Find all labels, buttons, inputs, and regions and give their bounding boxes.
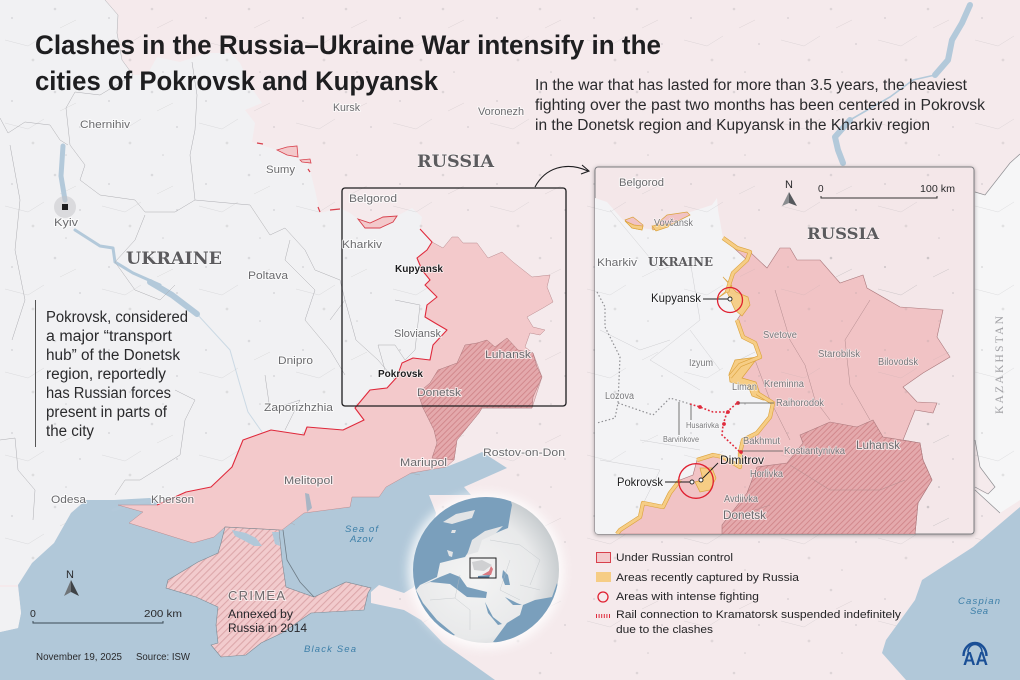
intro text: In the war that has lasted for more than 3.5 years, the heaviest xyxy=(535,77,968,94)
suspended grey rail xyxy=(597,292,690,423)
main map labels: Kupyansk xyxy=(395,263,443,275)
inset labels: Izyum xyxy=(689,358,713,369)
intro text: fighting over the past two months has been centered in Pokrovsk xyxy=(535,97,985,114)
inset oblast lines xyxy=(740,290,905,515)
Kazakhstan territory xyxy=(975,154,1020,513)
inset labels: Luhansk xyxy=(856,438,901,452)
inset labels: Lozova xyxy=(605,391,634,402)
side note: the city xyxy=(46,423,94,440)
sea labels: Azov xyxy=(349,534,374,545)
legend: recently captured: Areas recently captured by Russia xyxy=(616,572,800,584)
main map labels: Sloviansk xyxy=(394,328,441,340)
Black Sea xyxy=(478,575,490,578)
main map labels: Voronezh xyxy=(478,106,524,118)
inset labels: RUSSIA xyxy=(807,224,880,243)
sea labels: Sea xyxy=(970,606,988,617)
north arrow main xyxy=(64,569,79,596)
locator box xyxy=(342,188,566,406)
Kakhovka reservoir xyxy=(305,493,312,512)
main map labels: Luhansk xyxy=(485,349,532,361)
Crimea annotation: Russia in 2014 xyxy=(228,623,308,635)
Red Sea xyxy=(485,602,502,625)
main map labels: Odesa xyxy=(51,494,87,506)
Kyiv marker xyxy=(54,196,76,218)
yellow front line xyxy=(617,238,773,534)
rivers xyxy=(61,5,970,510)
main map labels: Dnipro xyxy=(278,355,313,367)
inset scale bar xyxy=(818,184,955,198)
side note xyxy=(35,300,188,447)
legend: under Russian control: Under Russian control xyxy=(616,552,733,564)
inset labels: Belgorod xyxy=(619,177,664,189)
Kharkiv border patch xyxy=(358,216,397,228)
main map labels: Kharkiv xyxy=(342,239,383,251)
inset labels: Kreminna xyxy=(764,379,804,390)
main map labels: UKRAINE xyxy=(126,249,222,269)
inset scale bar: 100 km xyxy=(920,184,955,195)
inset labels: Avdiivka xyxy=(724,494,758,505)
scale bar main: 0 xyxy=(30,608,36,620)
Crimea annotation: CRIMEA xyxy=(228,588,285,603)
inset labels: Kharkiv xyxy=(597,257,638,269)
Crimea xyxy=(166,527,371,657)
Caspian Sea xyxy=(882,507,1020,680)
inset labels: Svetove xyxy=(763,330,797,341)
side note: a major “transport xyxy=(46,328,173,345)
inset labels: Dimitrov xyxy=(720,453,764,467)
inset labels: UKRAINE xyxy=(648,255,713,269)
inset occupied area xyxy=(617,238,950,534)
Greenland and Iceland xyxy=(443,510,475,557)
front line main xyxy=(157,229,447,505)
main map labels: Poltava xyxy=(248,270,289,282)
inset north arrow xyxy=(782,179,797,206)
Danube delta land xyxy=(0,587,21,632)
legend: intense fighting: Areas with intense fighting xyxy=(616,591,759,603)
legend xyxy=(596,552,902,636)
Ukraine territory xyxy=(0,0,447,585)
side note: Pokrovsk, considered xyxy=(46,309,188,326)
main map labels xyxy=(51,102,565,506)
sea labels xyxy=(304,524,1000,655)
Sumy border patch xyxy=(277,146,311,163)
inset labels: Bakhmut xyxy=(743,436,780,447)
main map labels: Kursk xyxy=(333,102,360,114)
Black Sea and Sea of Azov xyxy=(0,452,507,680)
date and source: Source: ISW xyxy=(136,652,191,663)
main map labels: Rostov-on-Don xyxy=(483,447,565,459)
title xyxy=(35,30,661,96)
scale bar main xyxy=(30,608,182,623)
inset labels: Liman xyxy=(732,382,757,393)
globe locator box xyxy=(470,558,496,578)
side note: has Russian forces xyxy=(46,385,171,402)
scale bar main: 200 km xyxy=(144,608,182,620)
main map labels: Kherson xyxy=(151,494,194,506)
inset labels: Bilovodsk xyxy=(878,357,919,368)
date and source: November 19, 2025 xyxy=(36,652,122,663)
fighting circles xyxy=(665,288,742,498)
main map labels: Kyiv xyxy=(54,217,79,229)
recently captured zones xyxy=(625,212,770,492)
intro text xyxy=(535,77,985,134)
main map labels: Zaporizhzhia xyxy=(264,402,334,414)
Kazakhstan label: KAZAKHSTAN xyxy=(994,315,1006,414)
legend: rail connection: due to the clashes xyxy=(616,624,714,636)
inset map xyxy=(595,167,974,534)
inset Donbas hatched area xyxy=(722,420,932,534)
inset labels: Barvinkove xyxy=(663,435,699,444)
Caspian xyxy=(502,570,510,585)
sea labels: Caspian xyxy=(958,596,1000,607)
main map labels: RUSSIA xyxy=(417,152,495,172)
leader lines xyxy=(679,402,783,451)
north arrow main: N xyxy=(66,569,74,581)
main map labels: Belgorod xyxy=(349,193,397,205)
inset labels: Kostiantynivka xyxy=(784,446,845,457)
occupied territory main map xyxy=(118,143,553,657)
Crimea annotation: Annexed by xyxy=(228,609,293,621)
Sivash lagoons xyxy=(232,530,280,546)
legend: rail connection: Rail connection to Kramatorsk suspended indefinitely xyxy=(616,609,902,621)
main map labels: Melitopol xyxy=(284,475,333,487)
inset labels: Kupyansk xyxy=(651,291,702,305)
inset labels: Donetsk xyxy=(723,508,767,522)
inset labels: Starobilsk xyxy=(818,349,861,360)
title: cities of Pokrovsk and Kupyansk xyxy=(35,66,439,96)
inset labels xyxy=(597,177,919,522)
main map labels: Pokrovsk xyxy=(378,368,423,380)
South Atlantic xyxy=(416,590,455,636)
inset labels: Vovčansk xyxy=(654,218,694,229)
inset Ukraine territory xyxy=(595,198,773,534)
sea labels: Sea of xyxy=(345,524,379,535)
inset labels: Horlivka xyxy=(750,469,783,480)
main map labels: Chernihiv xyxy=(80,119,131,131)
Indian Ocean xyxy=(493,583,558,642)
main map labels: Mariupol xyxy=(400,457,447,469)
Scandinavia xyxy=(467,526,503,555)
AA logo: AA xyxy=(963,649,988,669)
Crimea annotation xyxy=(228,588,308,635)
Donbas hatched area xyxy=(418,338,542,460)
intro text: in the Donetsk region and Kupyansk in the Kharkiv region xyxy=(535,117,930,134)
oblast borders xyxy=(0,0,420,525)
globe xyxy=(403,490,564,649)
Arabat spit xyxy=(283,530,314,597)
inset labels: Husarivka xyxy=(686,421,720,430)
sea labels: Black Sea xyxy=(304,644,356,655)
side note: region, reportedly xyxy=(46,366,166,383)
Persian Gulf xyxy=(505,597,522,605)
inset north arrow: N xyxy=(785,179,793,191)
inset labels: Raihorodok xyxy=(776,398,825,409)
side note: hub” of the Donetsk xyxy=(46,347,180,364)
inset labels: Pokrovsk xyxy=(617,475,664,489)
date and source xyxy=(36,652,191,663)
inset scale bar: 0 xyxy=(818,184,824,195)
side note: present in parts of xyxy=(46,404,168,421)
small border incursions xyxy=(257,143,340,212)
Atlantic and Arctic xyxy=(413,497,512,590)
main map labels: Donetsk xyxy=(417,387,462,399)
arrow to inset xyxy=(535,165,589,187)
Mediterranean xyxy=(423,573,487,598)
main map labels: Sumy xyxy=(266,164,296,176)
title: Clashes in the Russia–Ukraine War intensify in the xyxy=(35,30,661,60)
Ukraine on globe xyxy=(472,560,492,571)
legend: rail connection xyxy=(596,609,902,636)
suspended red rail xyxy=(690,401,743,454)
